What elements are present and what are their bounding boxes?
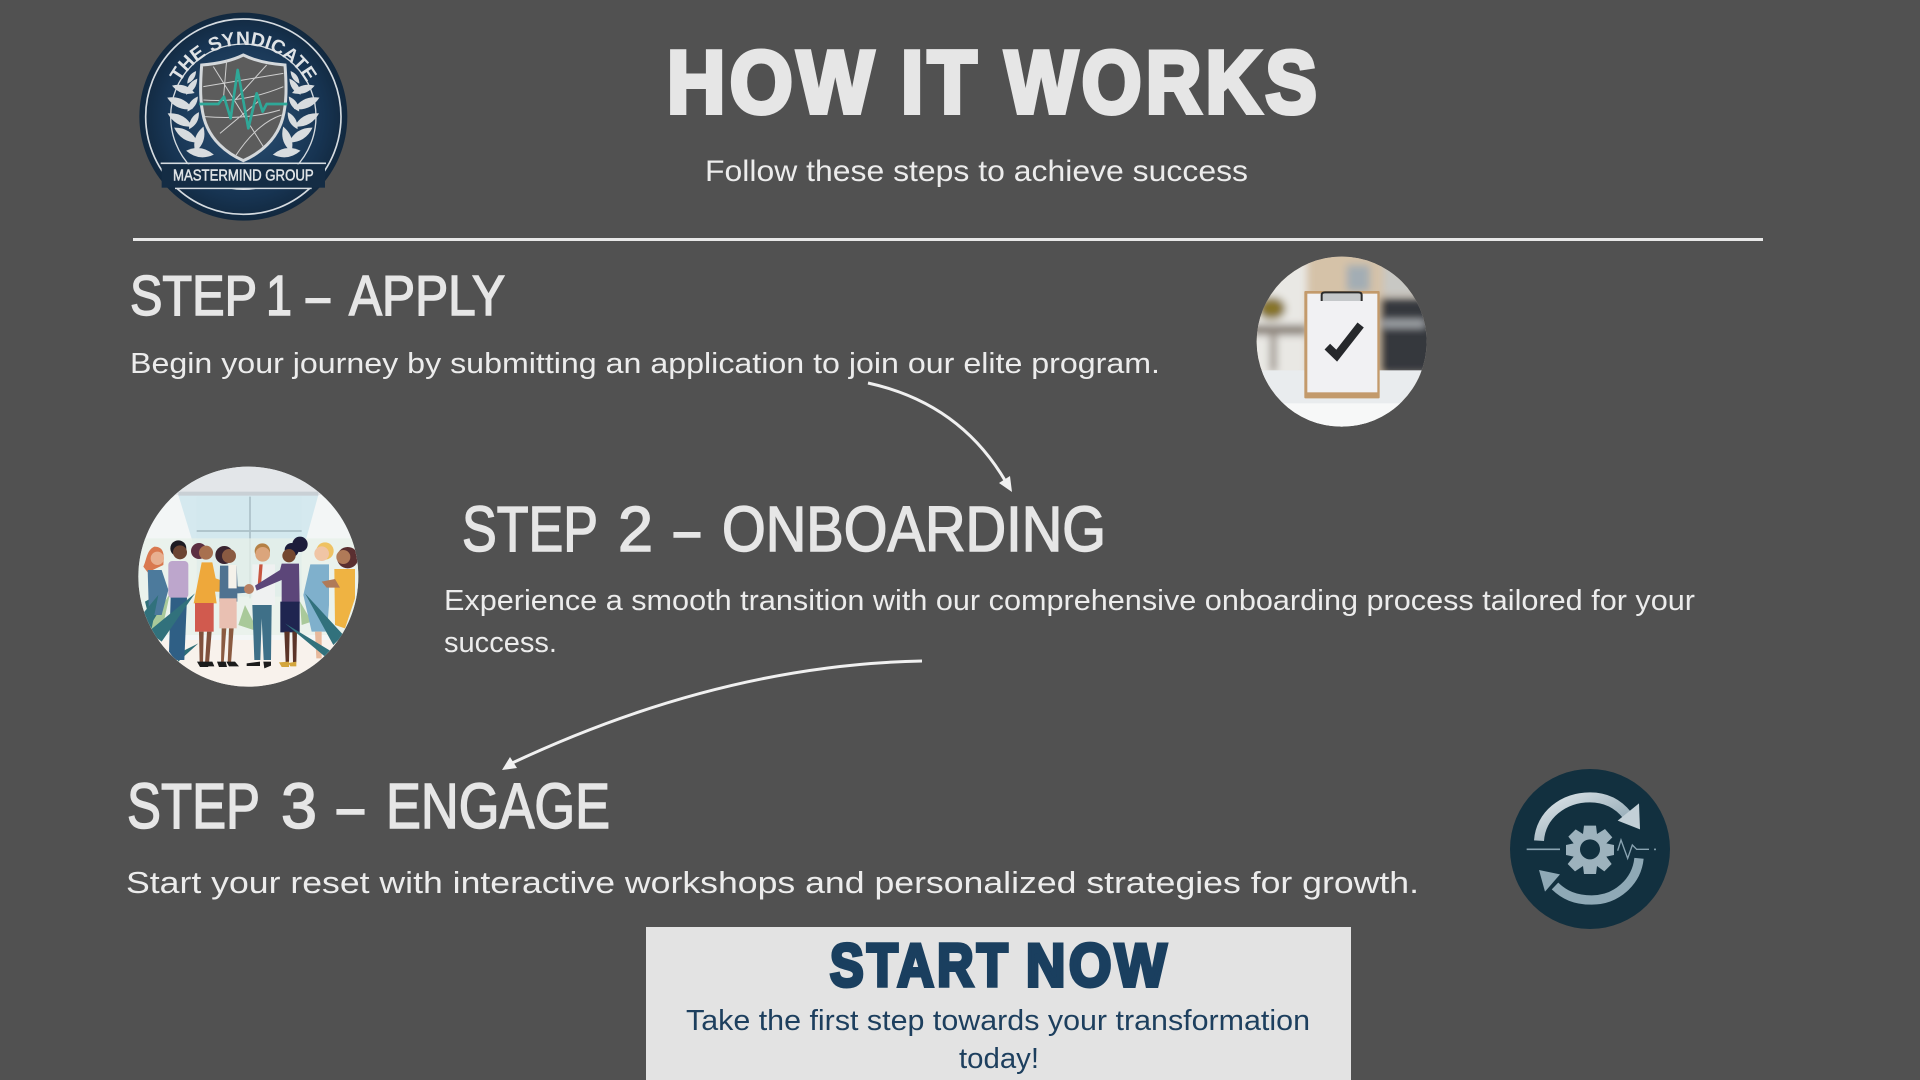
step 1 heading: – [306, 264, 330, 328]
step 1 heading: STEP [130, 264, 257, 328]
call to action panel [646, 927, 1351, 1080]
logo band [161, 163, 326, 188]
step 3 heading: ENGAGE [386, 770, 610, 842]
foreground leaves [142, 593, 343, 657]
step 3 description: Start your reset with interactive workshops and personalized strategies for growth. [126, 865, 1419, 900]
step 1 heading [130, 264, 505, 328]
step 1 heading: APPLY [349, 264, 505, 328]
arrow: step 1 to step 2 [868, 383, 1012, 492]
step 3 heading: STEP [127, 770, 260, 842]
logo: The Syndicate Mastermind Group [139, 12, 348, 221]
step 1 description: Begin your journey by submitting an application to join our elite program. [130, 348, 1160, 380]
icon: clipboard with check mark [1256, 256, 1427, 427]
person 5 [254, 543, 270, 554]
CTA heading [830, 932, 1170, 999]
icon: reset cycle with gear [1510, 769, 1670, 929]
logo ring text: THE SYNDICATE [169, 32, 318, 82]
step 2 description: success. [444, 627, 557, 659]
laurel wreath [165, 70, 321, 159]
person 3 [191, 543, 205, 559]
step 3 heading: 3 [281, 770, 317, 842]
step 2 heading: 2 [618, 493, 653, 565]
shield [201, 55, 286, 161]
title: HOW [667, 32, 878, 132]
title: IT [901, 32, 981, 132]
title: WORKS [1005, 32, 1321, 132]
handshake [244, 584, 254, 594]
icon: team shaking hands [138, 466, 358, 687]
CTA text: today! [959, 1043, 1039, 1075]
person 2 [170, 540, 186, 556]
person 6 [292, 537, 308, 552]
arrow: step 2 to step 3 [502, 661, 922, 770]
step 2 heading [462, 493, 1106, 565]
window [178, 496, 318, 538]
title [667, 32, 1321, 132]
header divider [133, 238, 1763, 241]
person 7 [316, 542, 334, 560]
person 1 [143, 547, 164, 572]
step 3 heading: – [337, 770, 364, 842]
step 2 description: Experience a smooth transition with our comprehensive onboarding process tailored for your [444, 585, 1695, 617]
step 2 heading: – [674, 493, 700, 565]
logo band text: MASTERMIND GROUP [173, 167, 314, 184]
step 1 heading: 1 [266, 264, 292, 328]
step 2 heading: ONBOARDING [722, 493, 1106, 565]
CTA heading: START [830, 932, 1011, 999]
pulse line [199, 70, 287, 128]
CTA heading: NOW [1026, 932, 1170, 999]
plants [145, 588, 198, 662]
step 2 heading: STEP [462, 493, 598, 565]
person 8 [337, 547, 358, 568]
step 3 heading [127, 770, 610, 842]
gear [1566, 826, 1614, 874]
CTA text: Take the first step towards your transformation [686, 1005, 1310, 1037]
subtitle: Follow these steps to achieve success [705, 155, 1248, 188]
step 2 description [444, 585, 1695, 659]
person 4 [215, 546, 233, 564]
CTA text [686, 1005, 1310, 1075]
